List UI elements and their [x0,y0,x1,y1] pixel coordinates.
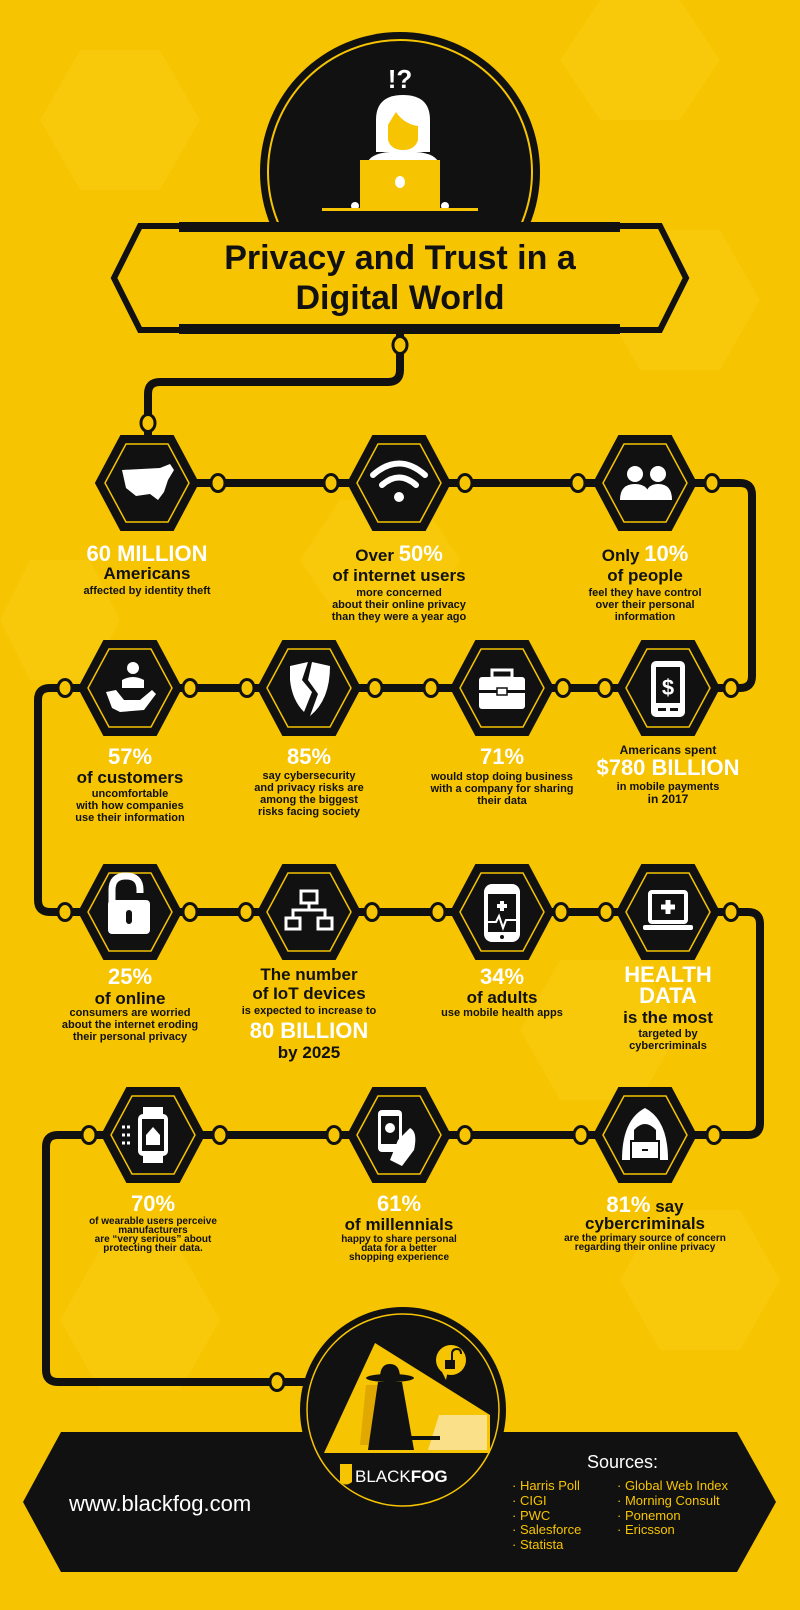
sources list: Sources: [587,1452,658,1472]
stat: 57%: uncomfortable [92,788,168,800]
stat: over 50%: than they were a year ago [332,611,467,623]
stat: IoT devices: is expected to increase to [242,1005,377,1017]
stat: 85%: risks facing society [258,806,361,818]
connector path [38,333,760,1382]
stat: only 10% [588,436,702,623]
sources list: · Ponemon [617,1508,681,1523]
stat: IoT devices: by 2025 [278,1043,340,1062]
stat: 70%: of wearable users perceive [89,1216,217,1227]
stat: only 10%: over their personal [595,599,695,611]
stat: 85%: 85% [287,744,331,769]
stat: health data: is the most [623,1008,713,1027]
stat: 81%: are the primary source of concern [564,1233,726,1244]
stat: 81%: regarding their online privacy [575,1242,716,1253]
header emblem: person with laptop [260,32,540,312]
stat: only 10%: Only 10% [602,541,688,566]
stat: 71%: their data [477,795,528,807]
stat: 25%: consumers are worried [69,1007,191,1019]
stat: $780 billion: in mobile payments [617,781,719,793]
stat: IoT devices: The number [260,965,358,984]
stat: over 50%: Over 50% [355,541,443,566]
stat: 57%: use their information [75,812,185,824]
stat: $780 billion [596,641,740,806]
stat: 25% [62,865,198,1043]
sources list: · Ericsson [617,1522,675,1537]
sources list: · Global Web Index [617,1478,729,1493]
stat: 70% [89,1088,217,1254]
stat: 25%: 25% [108,964,152,989]
stat: 61%: 61% [377,1191,421,1216]
sources list [512,1452,729,1552]
website url: www.blackfog.com [68,1491,251,1516]
footer emblem: spy with laptop and BLACKFOG logo [300,1307,506,1513]
stat: 81% [564,1088,726,1253]
stat: 57%: with how companies [75,800,184,812]
stat: 70%: 70% [131,1191,175,1216]
stat: only 10%: information [615,611,676,623]
stat: over 50%: of internet users [332,566,466,585]
sources list: · Statista [512,1537,564,1552]
footer banner [23,1432,776,1572]
sources list: · CIGI [512,1493,547,1508]
stat: 70%: protecting their data. [103,1243,203,1254]
stat: only 10%: feel they have control [588,587,702,599]
stat: 81%: cybercriminals [585,1214,705,1233]
stat: 57%: 57% [108,744,152,769]
stat: 61%: of millennials [345,1215,453,1234]
title banner: Privacy and Trust in a [224,239,577,277]
stat: over 50%: more concerned [356,587,442,599]
sources list: · PWC [512,1508,550,1523]
sources list: · Harris Poll [512,1478,580,1493]
stat: health data [617,865,719,1052]
stat: IoT devices: 80 BILLION [250,1018,368,1043]
stat: 57%: of customers [77,768,183,787]
sources list: · Morning Consult [617,1493,720,1508]
stat: 60 million: affected by identity theft [83,585,211,597]
stat: health data: cybercriminals [629,1040,707,1052]
stat: 34%: use mobile health apps [441,1007,563,1019]
stat: health data: HEALTH [624,962,712,987]
stat: over 50%: about their online privacy [332,599,467,611]
connector nodes [58,336,738,1390]
stat: 25%: about the internet eroding [62,1019,198,1031]
stat: 60 million [83,436,211,597]
stat: 25%: of online [95,989,165,1008]
header emblem: person with laptop: !? [388,64,412,94]
stat: 25%: their personal privacy [73,1031,188,1043]
stat: 85%: among the biggest [260,794,358,806]
stat: over 50% [332,436,467,623]
stat: 71%: with a company for sharing [429,783,574,795]
stat: only 10%: of people [607,566,683,585]
stat: 61%: shopping experience [349,1252,449,1263]
stat: health data: DATA [639,983,697,1008]
stat: IoT devices [242,865,377,1062]
stat: 61% [341,1088,457,1263]
title banner [114,222,686,334]
stat: 34% [441,865,563,1019]
stat: $780 billion: $ [662,675,674,700]
stat: 81%: 81% say [606,1192,684,1217]
stat: 61%: data for a better [361,1243,437,1254]
stat: 85% [254,641,364,818]
stat: 60 million: Americans [104,564,190,583]
title banner: Digital World [295,279,505,317]
stat: 70%: are “very serious” about [95,1234,212,1245]
stat: 85%: and privacy risks are [254,782,364,794]
stat: $780 billion: in 2017 [648,792,689,806]
stat: 61%: happy to share personal [341,1234,457,1245]
stat: 34%: 34% [480,964,524,989]
sources list: · Salesforce [512,1522,581,1537]
stat: 71% [429,641,574,807]
stat: 60 million: 60 MILLION [86,541,208,566]
stat: 57% [75,641,185,824]
stat: 71%: 71% [480,744,524,769]
footer emblem: spy with laptop and BLACKFOG logo: BLACKFOG [355,1467,448,1486]
stat: 85%: say cybersecurity [263,770,356,782]
stat: 70%: manufacturers [118,1225,188,1236]
stat: health data: targeted by [638,1028,699,1040]
stat: $780 billion: Americans spent [620,743,716,757]
stat: 34%: of adults [467,988,537,1007]
stat: 71%: would stop doing business [430,771,573,783]
stat: IoT devices: of IoT devices [252,984,366,1003]
stat: $780 billion: $780 BILLION [596,755,740,780]
